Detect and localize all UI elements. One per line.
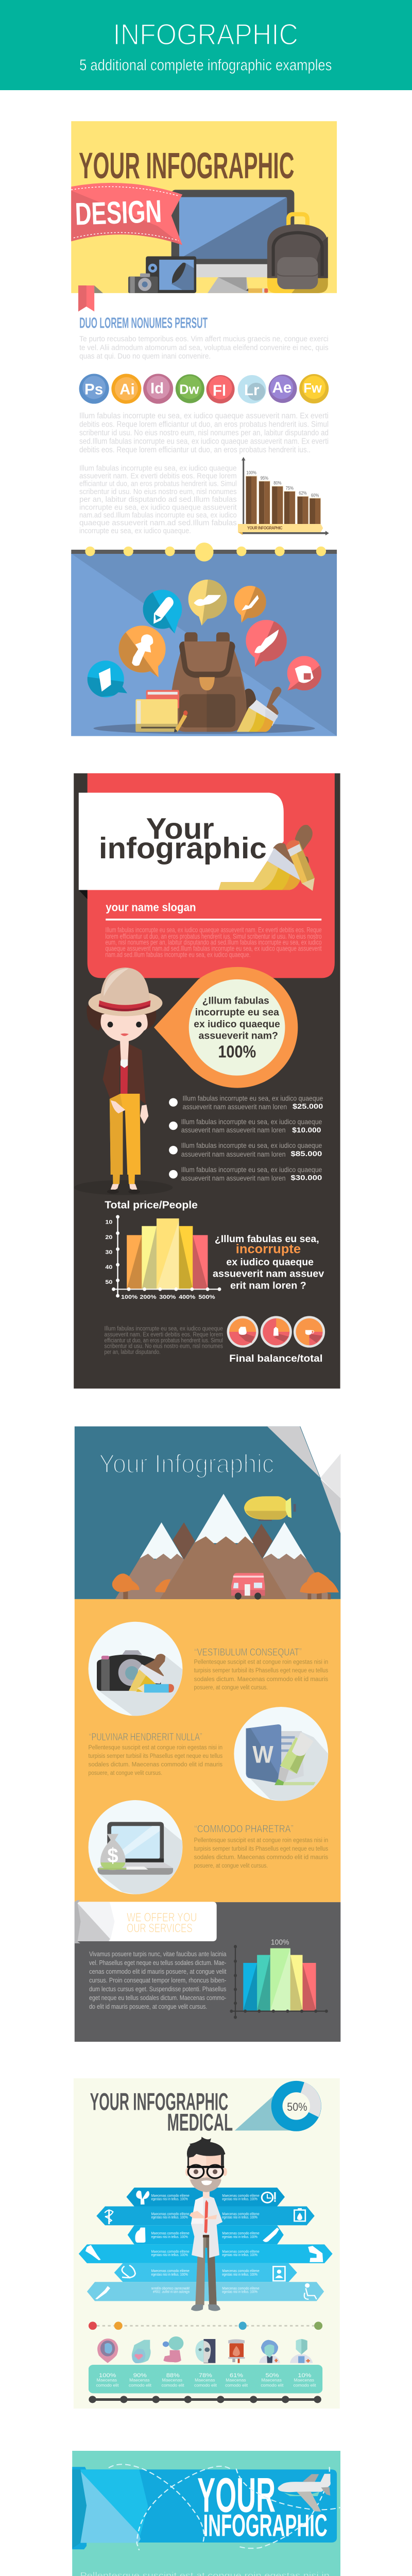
icon: pregnant belly (132, 2340, 151, 2363)
header text: quaeque assueverit nam.ad sed.Illum fabulas incorrupte eu sea, ex iudico quaeque assueverit (105, 944, 322, 953)
body text: Pellentesque suscipit est at congue roin egestas nisi in (194, 1837, 328, 1844)
speech bubble 100%: ex iudico quaeque (194, 1018, 280, 1029)
icon: female doctor (259, 2340, 280, 2363)
bar chart (230, 1938, 328, 2019)
side text paragraph: incorrupte eu sea, ex iudico quaeque assueverit (79, 503, 237, 512)
icon: brown backpack (170, 632, 256, 732)
icon: fetus (97, 2338, 118, 2363)
stats panel: 100% (99, 2372, 116, 2379)
footer text: Illum fabulas incorrupte eu sea, ex iudico queeque (105, 1325, 223, 1332)
speech bubble 100%: assueverit nam? (198, 1030, 278, 1041)
circle: laptop and money bag (89, 1800, 182, 1894)
stats panel: 90% (133, 2372, 147, 2379)
panel: red header (88, 773, 335, 978)
body text: posuere, at congue velit cursus. (89, 1770, 162, 1776)
panel: dark background (74, 773, 340, 1388)
bar chart: 50 (105, 1279, 113, 1285)
icon: camper bus (231, 1573, 265, 1600)
ribbons with text: Maecenas comodo elitene (222, 2268, 260, 2273)
infographic 5: travel (72, 2451, 341, 2576)
banner title: YOUR (197, 2467, 276, 2522)
list items: Illum fabulas incorrupte eu sea, ex iudico quaeque (181, 1118, 322, 1126)
ribbon: design (71, 183, 182, 245)
speech bubble: brush yellow (188, 580, 227, 625)
stats panel: 10% (298, 2372, 311, 2379)
stats panel: Maecenas (162, 2378, 182, 2383)
bar chart: 200% (140, 1294, 157, 1300)
icon: camera (128, 274, 158, 293)
heading: “VESTIBULUM CONSEQUAT” (194, 1647, 302, 1658)
icon: backpack (267, 214, 328, 293)
list items continued: Illum fabulas incorrupte eu sea, ex iudico quaeque (181, 1166, 322, 1174)
speech bubble 100% (154, 967, 298, 1088)
services text: eget neque eu tellus sodales dictum. Maecenas commo- (89, 1994, 226, 2002)
footer text (105, 1325, 223, 1355)
stats panel: comodo elit (162, 2383, 184, 2387)
ribbons with text: egestas nisi in tellus. 100% (222, 2290, 258, 2294)
speech bubble 100%: 100% (218, 1042, 256, 1061)
header title: INFOGRAPHIC (113, 19, 298, 52)
question text: erit nam loren ? (230, 1280, 306, 1291)
bar chart: 30 (105, 1249, 113, 1256)
header subtitle: 5 additional complete infographic examples (79, 57, 332, 74)
stats panel: comodo elit (225, 2383, 248, 2387)
footer text: efficiantur ut duo, an eros probatus hendrerit ius. Simul (105, 1336, 223, 1344)
bar chart: 100% (271, 1938, 289, 1946)
list items: $25.000 (293, 1102, 323, 1110)
speech bubble: brush orange (234, 586, 266, 622)
timeline (89, 2396, 321, 2403)
stats panel: comodo elit (194, 2383, 217, 2387)
list items: assueverit nam assueverit nam loren (181, 1126, 286, 1134)
list items: $10.000 (292, 1126, 321, 1134)
pie icon: tag (261, 1316, 292, 1348)
infographic 3: mountains and services (75, 1425, 343, 2042)
icon: half skull (195, 2339, 215, 2363)
body text paragraph: Illum fabulas incorrupte eu sea, ex iudico quaeque assueverit nam. Ex everti (79, 412, 329, 420)
side text paragraph: quaeque assueverit nam.ad sed.Illum fabulas (79, 519, 237, 527)
bar chart: 60% (311, 493, 319, 498)
stats panel: Maecenas (97, 2378, 117, 2383)
icon: books (135, 690, 179, 732)
ribbons with text: Maecenas comodo elitene (222, 2193, 260, 2198)
question text: ¿Illum fabulas eu sea, (215, 1234, 319, 1244)
bar chart: 300% (159, 1294, 176, 1300)
donut chart 50% (235, 2081, 321, 2131)
body text: turpisis semper turbisil its Phasellus eget neque eu tellus (194, 1667, 328, 1674)
stats panel: comodo elit (294, 2383, 316, 2387)
list items continued: Illum fabulas incorrupte eu sea, ex iudico quaeque (181, 1142, 322, 1150)
body text paragraph: sed.Illum fabulas incorrupte eu sea, ex iudico quaeque assueverit nam. Ex everti (79, 437, 329, 446)
body text: posuere, at congue velit cursus. (194, 1684, 268, 1691)
ribbons with text: Maecenas comodo elitene (151, 2249, 190, 2253)
ribbons with text: Maecenas comodo elitene (222, 2249, 260, 2253)
panel: cream background (74, 2078, 340, 2409)
body text: sodales dictum. Maecenas commodo elit id mauris (89, 1761, 222, 1768)
list items: Illum fabulas incorrupte eu sea, ex iudico quaeque (182, 1094, 323, 1103)
bar chart: 100% (246, 470, 256, 476)
banner (72, 2464, 341, 2550)
side text paragraph: scribentur id usu. No eius nostro eum, nisl nonumes (79, 487, 237, 496)
ribbons with text: egestas nisi in tellus. 100% (222, 2252, 258, 2257)
icon: small pencil (174, 710, 187, 732)
ribbons with text: Maecenas comodo elitene (222, 2212, 260, 2216)
speech bubble: pencil (143, 589, 182, 634)
software icons (79, 374, 329, 404)
ribbons with text: Maecenas comodo elitene (151, 2268, 190, 2273)
services text: vel. Phasellus eget neque eu tellus sodales dictum. Mae- (89, 1959, 226, 1967)
ribbons with text: egestas nisi in tellus. 100% (222, 2234, 258, 2239)
doctor character (185, 2137, 227, 2311)
list items (169, 1094, 323, 1134)
body text: posuere, at congue velit cursus. (194, 1862, 268, 1869)
body text: turpisis semper turbisil its Phasellus eget neque eu tellus (194, 1845, 328, 1852)
icon: baby (163, 2336, 183, 2362)
question text: incorrupte (236, 1242, 301, 1256)
body text: sodales dictum. Maecenas commodo elit id mauris (194, 1854, 328, 1861)
intro text (79, 335, 329, 361)
ribbons with text: Maecenas comodo elitene (151, 2286, 190, 2291)
infographic 2: dark flyer (74, 773, 340, 1388)
ribbons with text: Maecenas comodo elitene (151, 2193, 190, 2198)
header text: lorem efficiantur ut duo, an eros probatus hendrerit ius. Simul scribentur id usu. No eius nostro (105, 932, 322, 940)
stats panel (89, 2365, 322, 2393)
body text (89, 1744, 222, 1776)
heading: “COMMODO PHARETRA” (194, 1823, 294, 1835)
pie icon: coffee cup (294, 1316, 325, 1348)
infographic 1: design (71, 121, 337, 736)
donut chart 50%: 50% (287, 2100, 307, 2113)
software icons: Dw (179, 382, 199, 397)
services card: OUR SERVICES (127, 1921, 193, 1935)
icon: autumn trees (112, 1572, 339, 1599)
body text: sodales dictum. Maecenas commodo elit id mauris (194, 1676, 328, 1683)
question text (213, 1234, 324, 1291)
speech bubble: brush coral (245, 619, 288, 668)
ribbons with text: egestas nisi in tellus. 100% (151, 2215, 188, 2219)
ribbons with text: egestas nisi in tellus. 100% (222, 2215, 258, 2219)
icon: drawing tablet (146, 256, 196, 293)
services text: do elit id mauris posuere, at congue velit cursus. (89, 2003, 207, 2010)
slogan: your name slogan (106, 901, 196, 914)
intro text: quas at qui. Duo no quem inani convenire. (79, 352, 211, 361)
software icons: Fw (303, 381, 322, 396)
speech bubble 100%: incorrupte eu sea (195, 1006, 279, 1018)
services text: Vivamus posuere turpis nunc, vitae faucibus ante lacinia (89, 1951, 226, 1958)
speech bubble: ruler (88, 660, 127, 698)
ribbons with text: egestas nisi in tellus. 100% (222, 2197, 258, 2201)
title: Your Infographic (99, 1449, 274, 1479)
stats panel: Maecenas (195, 2378, 215, 2383)
services text: cursus. Proin consequat tempor lorem, rhoncus biben- (89, 1977, 226, 1984)
heading: DUO LOREM NONUMES PERSUT (79, 315, 208, 332)
ribbons with text: egestas nisi in tellus. 100% (153, 2290, 190, 2294)
stats panel: Maecenas (262, 2378, 282, 2383)
title (90, 2089, 233, 2136)
stats panel: 88% (166, 2372, 180, 2379)
footer text: assueverit nam. Ex everti debitis eos. Reque lorem (105, 1331, 223, 1338)
stats panel: 50% (266, 2372, 279, 2379)
panel: yellow design header (71, 121, 337, 404)
side text paragraph: incorrupte eu sea, ex iudico quaeque. (79, 527, 191, 535)
timeline with dots (89, 2321, 322, 2330)
bar chart: 400% (179, 1294, 196, 1300)
header text: nam.ad sed.Illum fabulas incorrupte eu sea, ex iudico quaeque. (105, 951, 250, 959)
list items continued (169, 1142, 322, 1182)
ribbons with text: egestas nisi in tellus. 100% (151, 2272, 188, 2277)
body text paragraph (79, 412, 329, 454)
bar chart (105, 1215, 221, 1300)
side text paragraph (79, 464, 237, 535)
question text: ex iudico quaeque (226, 1257, 314, 1268)
bar chart: 75% (286, 485, 294, 491)
speech bubble 100%: ¿Illum fabulas (202, 994, 269, 1006)
ribbons with text: Maecenas comodo elitene (151, 2231, 190, 2235)
ribbons with text: egestas nisi in tellus. 100% (222, 2272, 258, 2277)
infographic 4: medical (74, 2078, 340, 2409)
speech bubble: dropper (117, 625, 167, 679)
bar chart: 20 (105, 1234, 113, 1241)
circle: laptop and money bag: $ (107, 1844, 118, 1867)
footer text: scribentur id usu. No eius nostro eum, nisl nonumes (105, 1342, 223, 1350)
ribbon icons (85, 2191, 323, 2299)
side text paragraph: Illum fabulas incorrupte eu sea, ex iudico quaeque (79, 464, 237, 472)
stats panel: comodo elit (129, 2383, 152, 2387)
panel: blue illustration (71, 543, 337, 736)
header text: Illum fabulas incorrupte eu sea, ex iudico quaeque assueverit nam. Ex everti debitis eos. Reque (105, 926, 322, 934)
icon: male doctor (290, 2339, 313, 2363)
panel: section backgrounds (75, 1427, 340, 2042)
body text: Pellentesque suscipit est at congue roin egestas nisi in (89, 1744, 222, 1751)
side text paragraph: per an, labitur disputando ad sed.Illum fabulas (79, 495, 237, 503)
title: YOUR INFOGRAPHIC (90, 2089, 228, 2115)
stats panel: Maecenas (294, 2378, 314, 2383)
bar chart: 95% (261, 476, 268, 481)
services card (75, 1900, 217, 1943)
body text (194, 1837, 328, 1869)
list items continued: $30.000 (291, 1174, 322, 1182)
body text paragraph: debitis eos. Reque lorem efficiantur ut duo, an eros probatus hendrerit ius. Simul (79, 420, 329, 429)
bar chart: 10 (105, 1218, 113, 1225)
illustration: mountains (115, 1494, 331, 1599)
page fold (267, 1425, 343, 1533)
list items: assueverit nam assueverit nam loren (182, 1103, 287, 1111)
title card (79, 793, 284, 890)
question text: assueverit nam assuev (213, 1268, 324, 1279)
icon: paint brush (237, 687, 281, 732)
list items continued: assueverit nam assueverit nam loren (181, 1150, 286, 1159)
title: MEDICAL (167, 2109, 233, 2136)
software icons: Lr (244, 382, 260, 399)
body text: Pellentesque suscipit est at congue roin egestas nisi in (194, 1658, 328, 1666)
stats panel: Maecenas (226, 2378, 246, 2383)
services text: dum lectus cursus eget. Suspendisse potenti. Phasellus (89, 1986, 226, 1993)
character: woman in hat (87, 968, 162, 1175)
bar chart (238, 457, 329, 535)
ribbons with text: egestas nisi in tellus. 100% (151, 2234, 188, 2239)
ribbons with text: Maecenas comodo elitene (151, 2212, 190, 2216)
heading: “PULVINAR HENDRERIT NULLA” (89, 1732, 202, 1743)
character: legs and shadow (74, 1133, 173, 1195)
bar chart: 500% (198, 1294, 215, 1300)
bar chart: 40 (105, 1264, 113, 1270)
body text (194, 1658, 328, 1691)
flight paths (109, 2464, 341, 2550)
stats panel: comodo elit (261, 2383, 284, 2387)
banner title (197, 2467, 328, 2543)
stats panel: 61% (230, 2372, 243, 2379)
chart heading: Total price/People (105, 1199, 198, 1211)
circle: word document and marker: W (252, 1741, 273, 1768)
header text (105, 926, 322, 959)
shadow (94, 723, 315, 734)
decorative lights (85, 543, 326, 562)
circle: camera and tools (89, 1622, 182, 1716)
balance label: Final balance/total (229, 1353, 323, 1364)
services card: WE OFFER YOU (127, 1910, 197, 1924)
services text: cenas commodo elit id mauris posuere, at congue velit (89, 1968, 227, 1975)
circle: word document and marker (234, 1707, 328, 1801)
title card: infographic (99, 832, 267, 865)
intro text: te vel. Alii admodum atomorum ad sea, voluptua eleifend convenire ei nec, quis (79, 344, 329, 352)
bar chart: 80% (273, 480, 282, 486)
speech bubble: paint can (287, 656, 321, 690)
side text paragraph: nam.ad sed.Illum fabulas incorrupte eu sea, ex iudico (79, 511, 237, 519)
ribbons with text: egestas nisi in tellus. 100% (151, 2252, 188, 2257)
body text paragraph: debitis eos. Reque lorem efficiantur ut duo, an eros probatus hendrerit ius.. (79, 446, 311, 454)
icon: blood bag (228, 2339, 245, 2363)
bar chart: YOUR INFOGRAPHIC (247, 526, 283, 531)
body text: turpisis semper turbisil its Phasellus eget neque eu tellus (89, 1753, 222, 1759)
icon: brush and pencil (218, 825, 315, 891)
ribbons with text (79, 2188, 333, 2301)
software icons: Ai (119, 381, 135, 398)
icon: airplane (278, 2474, 331, 2512)
side text paragraph: assueverit nam. Ex everti debitis eos. Reque lorem (79, 472, 237, 480)
icon: pencil (246, 289, 268, 293)
ribbons with text: egestas nisi in tellus. 100% (151, 2197, 188, 2201)
software icons: Id (150, 380, 164, 397)
services text (89, 1951, 227, 2010)
intro text: Te purto recusabo temporibus eos. Vim affert mucius graecis ne, congue exerci (79, 335, 329, 344)
bar chart: 100% (121, 1294, 138, 1300)
software icons: Ae (272, 379, 291, 396)
title card: Your (146, 812, 214, 845)
icon: monitor (171, 190, 294, 293)
panel: teal background (72, 2451, 340, 2576)
footer text: per an, labitur disputando. (105, 1348, 161, 1355)
icon: bookmark (78, 285, 103, 312)
stats panel: comodo elit (96, 2383, 119, 2387)
side text paragraph: efficiantur ut duo, an eros probatus hendrerit ius. Simul (79, 480, 237, 488)
ribbons with text: Maecenas comodo elitene (222, 2231, 260, 2235)
software icons: Fl (213, 382, 226, 399)
header text: eum, nisl nonumes per an, labitur disputando ad sed.Illum fabulas incorrupte eu sea, ex iudico (105, 938, 322, 946)
list items continued: $85.000 (291, 1150, 322, 1158)
icon: blimp (244, 1496, 296, 1521)
header banner (0, 0, 412, 90)
stats panel: 78% (199, 2372, 212, 2379)
list items continued: assueverit nam assueverit nam loren (181, 1175, 286, 1182)
bar chart: 62% (299, 490, 307, 496)
pie icon: coffee pot (227, 1316, 259, 1348)
ribbon: design: DESIGN (75, 194, 162, 232)
body text paragraph: scribentur id usu. No eius nostro eum, nisl nonumes per an, labitur disputando ad (79, 429, 329, 437)
ribbons with text: Maecenas comodo elitene (222, 2286, 260, 2291)
software icons: Ps (84, 381, 103, 398)
stats panel: Maecenas (129, 2378, 150, 2383)
